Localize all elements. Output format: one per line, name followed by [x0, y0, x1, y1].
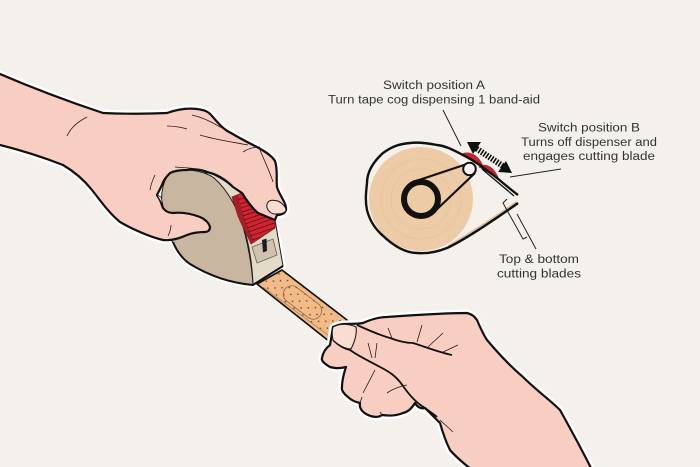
- left hand halo: [0, 68, 286, 240]
- dispenser tan face: [162, 170, 253, 285]
- leader: switch A: [443, 110, 461, 146]
- right thumb and creases: [333, 325, 452, 417]
- right thumbnail: [332, 324, 356, 349]
- slider slot: [262, 238, 267, 252]
- tape roll: [369, 147, 473, 251]
- right hand: [322, 313, 592, 467]
- illustration: left hand holding dispenser: [0, 68, 286, 285]
- label: switch position B: engages cutting blade: [523, 151, 655, 163]
- switch position B bump: [479, 165, 499, 180]
- label: switch position A: Turn tape cog dispensing 1 band-aid: [328, 94, 540, 106]
- label: cutting blades: Top & bottom: [499, 254, 579, 266]
- label: switch position B: [521, 122, 657, 163]
- diagram: dispenser cross-section: [366, 110, 561, 253]
- right hand halo: [322, 313, 592, 467]
- label: cutting blades: [497, 254, 581, 280]
- band-aid strip: [257, 270, 347, 342]
- left hand: [0, 68, 286, 240]
- illustration: right hand: [322, 313, 592, 467]
- blades bracket and leader: [503, 199, 536, 249]
- tape leading to blades: [448, 201, 518, 249]
- switch position A bump: [461, 153, 483, 166]
- label: switch position A: Switch position A: [383, 80, 485, 92]
- label: switch position A: [328, 80, 540, 106]
- casing outline: [366, 143, 518, 253]
- drive belts: [413, 164, 475, 213]
- slider window: [252, 239, 277, 263]
- label: switch position B: Turns off dispenser and: [521, 137, 657, 149]
- band-aid gauze pad: [280, 282, 325, 323]
- dispenser body: [162, 168, 283, 285]
- left thumbnail: [267, 200, 286, 214]
- left hand creases: [67, 115, 273, 236]
- band-aid edge strip: [263, 287, 332, 338]
- tooth of hand gap: [157, 195, 163, 205]
- label: switch position B: Switch position B: [538, 122, 640, 134]
- leader: switch B: [510, 169, 561, 177]
- inner cutting blade: [482, 169, 514, 196]
- tape cog: [463, 163, 476, 175]
- hub ring: [404, 182, 438, 216]
- dispenser side face: [200, 168, 283, 285]
- label: cutting blades: cutting blades: [497, 268, 581, 280]
- dispenser halo: [173, 223, 283, 285]
- red switch: [232, 192, 280, 244]
- band-aid dots: [258, 271, 347, 341]
- dispenser bottom outline: [173, 242, 283, 285]
- double-headed dashed arrow: [467, 142, 512, 173]
